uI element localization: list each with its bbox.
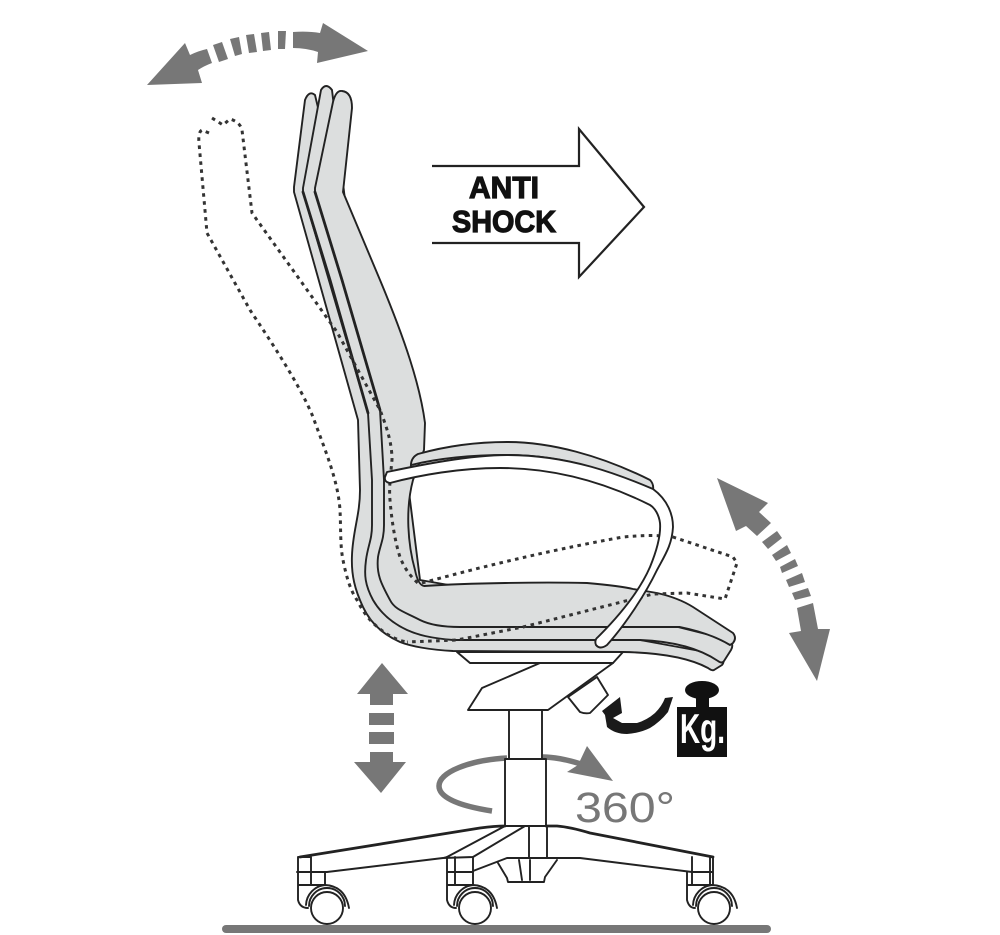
chair back middle shell and middle seat layer [303,86,732,662]
base hub foot [498,860,557,882]
tilt mechanism [468,663,613,710]
label: anti shock: SHOCK [452,204,557,239]
base legs [297,826,713,872]
label: 360 degrees: 360° [575,784,675,832]
caster: centre [447,857,497,924]
caster: left [298,857,349,924]
chair [199,86,737,759]
gas lift lower [505,759,546,826]
armrest pad [411,442,653,490]
mechanism knob [568,677,608,713]
dashed outline: tilted seat [407,536,737,642]
backrest and seat cushion [315,91,735,645]
arrow: seat tilt [717,478,830,681]
arrow: anti shock [432,129,644,277]
armrest tube [385,455,673,648]
icon: kg weight [677,681,727,757]
icon: kg weight: Kg. [680,705,725,752]
dashed outline: reclined backrest [199,118,420,642]
label: anti shock [452,170,557,239]
caster: right [687,857,737,924]
arrow: backrest recline [147,23,368,85]
arrow: height adjustment [354,663,408,793]
floor line [222,925,771,933]
icon: curved tension arrow [602,697,673,734]
seat bracket [457,652,623,663]
gas lift upper [509,710,542,759]
chair back outer shell and lower seat layer [294,93,724,670]
label: anti shock: ANTI [469,170,539,205]
shell accent lines [303,192,380,413]
arrow: 360 degree swivel [439,746,613,811]
five star base [297,826,737,924]
